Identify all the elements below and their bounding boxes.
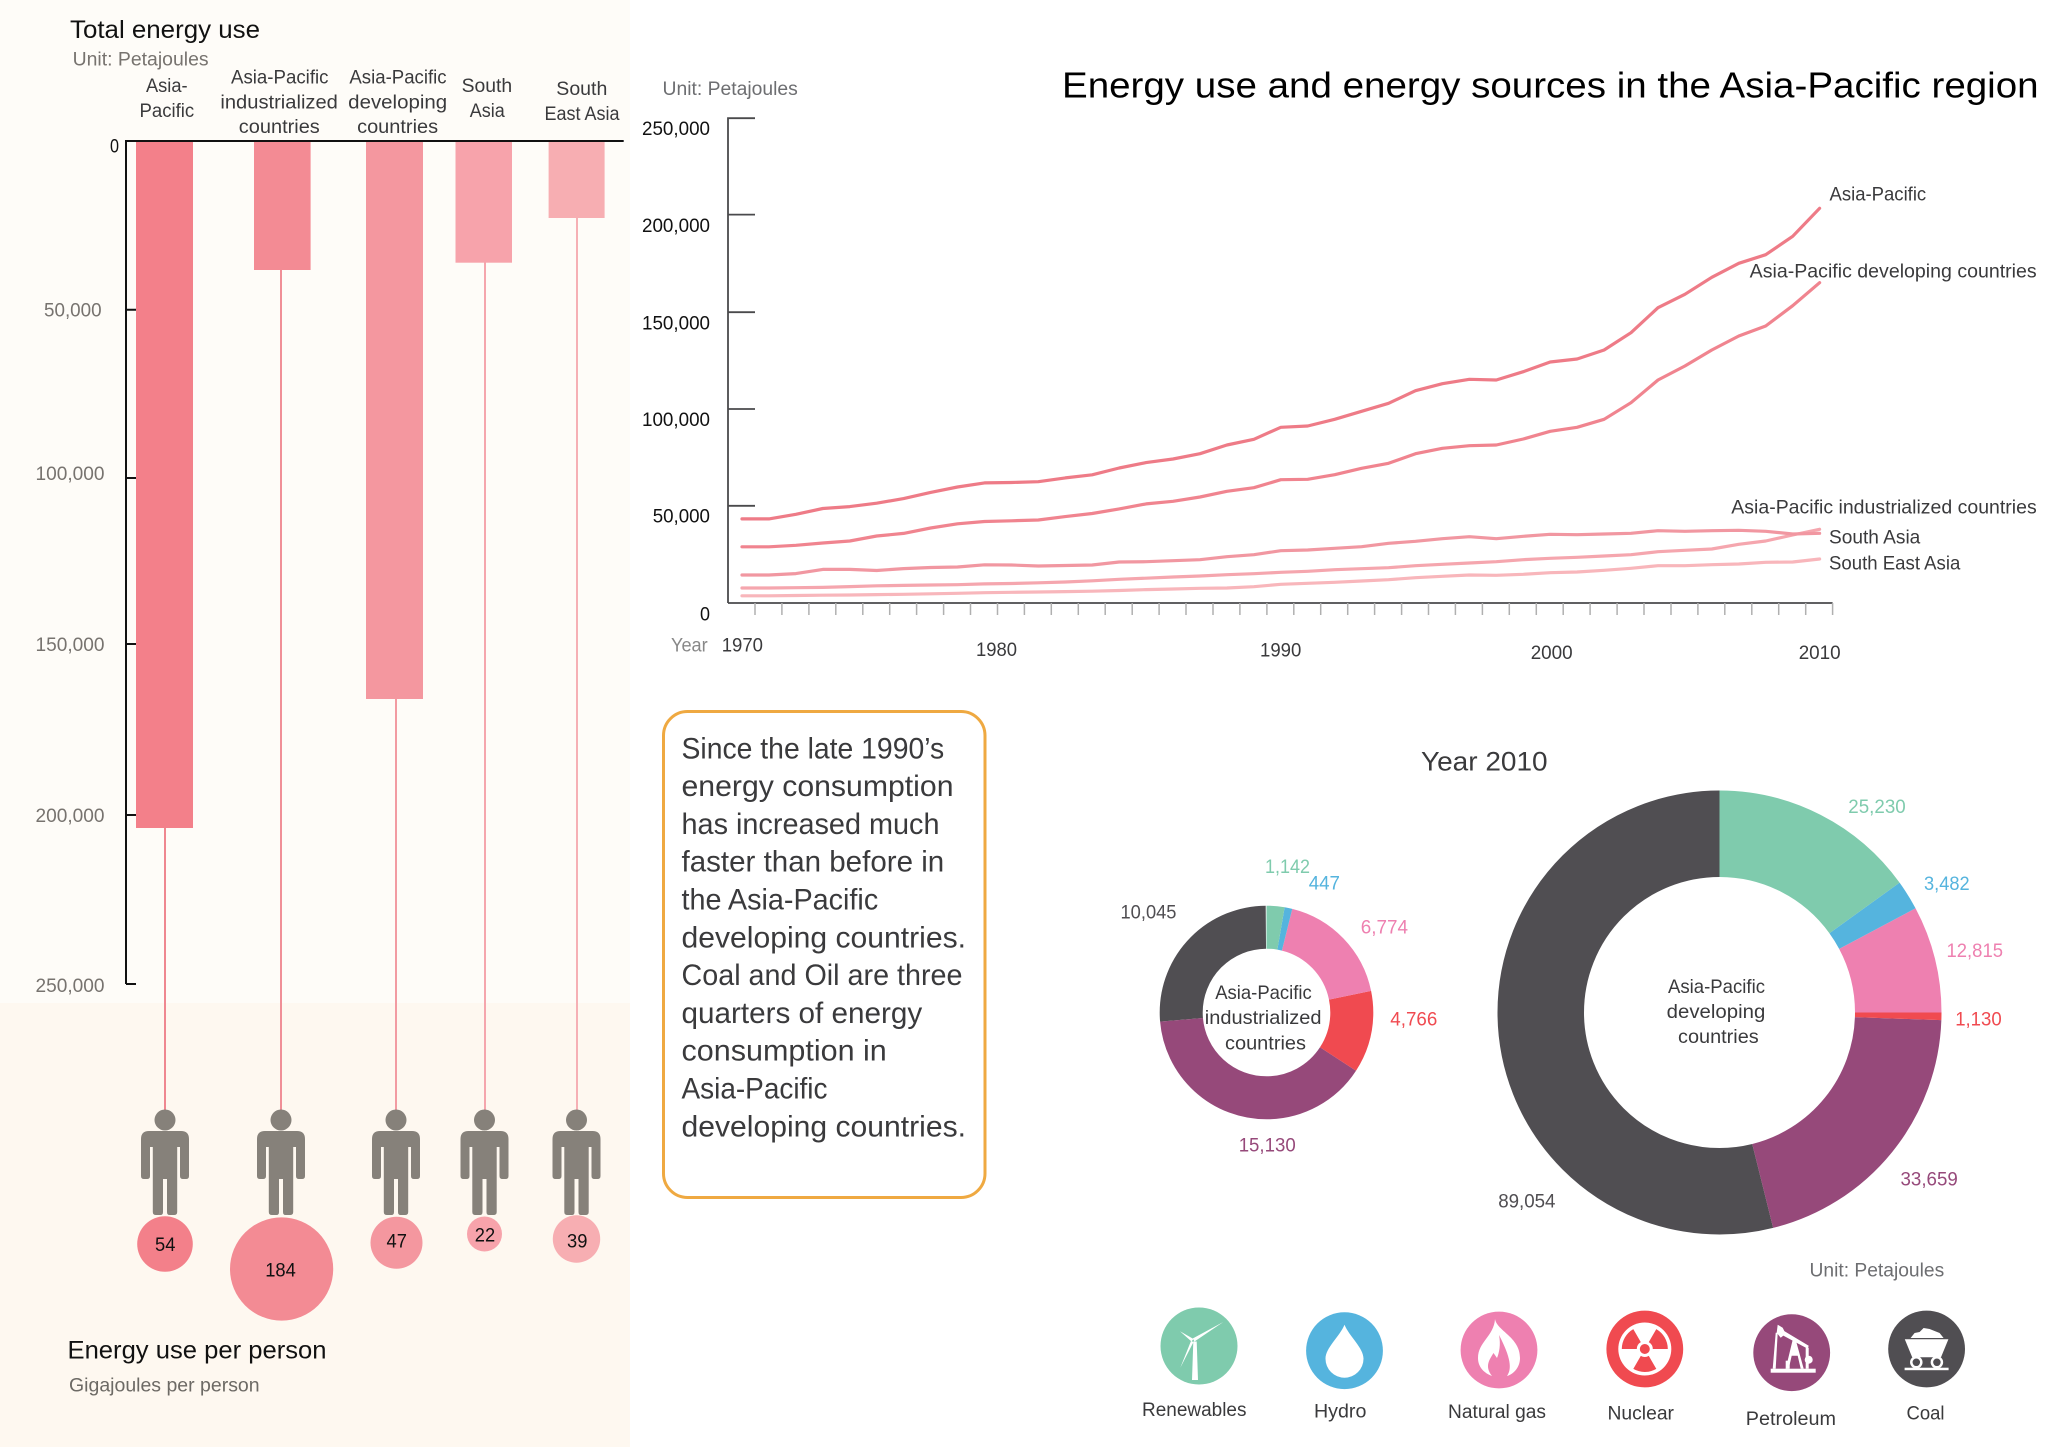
axis values: 250,000 (36, 976, 104, 997)
icon: coal (1888, 1311, 1965, 1425)
line labels: Asia-Pacific developing countries (1750, 260, 2037, 282)
column labels: Pacific (140, 101, 194, 122)
unit label: per person: Gigajoules per person (69, 1376, 260, 1397)
y axis values: 150,000 (642, 313, 710, 334)
line: Asia-Pacific industrialized countries (742, 530, 1820, 575)
icon: natural gas: Natural gas (1448, 1402, 1546, 1423)
per-person figure: South East Asia (552, 1110, 600, 1263)
x axis values: 1970 (722, 636, 763, 657)
per-person figure: Asia-Pacific industrialized countries (230, 1110, 333, 1321)
donut values: 6,774 (1361, 918, 1408, 939)
donut center label: countries (1225, 1032, 1306, 1054)
callout text: Since the late 1990’s (682, 732, 944, 765)
axis values: 200,000 (36, 806, 104, 827)
axis values: 0 (110, 137, 119, 158)
donut values: 15,130 (1239, 1136, 1296, 1156)
x axis values: Year (671, 636, 708, 657)
callout text: the Asia-Pacific (682, 884, 878, 916)
line labels: South East Asia (1829, 553, 1960, 575)
axis values: 150,000 (36, 635, 104, 656)
icon: nuclear (1606, 1311, 1683, 1425)
per-person figure: Asia-Pacific: 54 (155, 1235, 176, 1256)
per-person figure: South Asia (460, 1110, 508, 1252)
legend: energy sources (1142, 1308, 1965, 1430)
donut values: 25,230 (1848, 797, 1906, 818)
donut center label: industrialized (1205, 1007, 1322, 1029)
icon: petroleum: Petroleum (1746, 1409, 1836, 1430)
axis values (36, 137, 119, 997)
per-person figure: Asia-Pacific developing countries (370, 1110, 422, 1269)
y axis values: 50,000 (653, 507, 710, 528)
panel: total energy use and energy per person (0, 0, 630, 1447)
callout text: developing countries. (682, 1110, 966, 1143)
bar: Asia-Pacific developing countries (366, 141, 423, 699)
donut values: 10,045 (1120, 902, 1176, 923)
callout text (682, 732, 966, 1143)
donut values (1120, 857, 1437, 1156)
y axis values: 100,000 (642, 410, 710, 431)
y axis values: 0 (700, 605, 710, 626)
donut center label (1667, 976, 1765, 1048)
axes (126, 141, 624, 984)
icon: coal: Coal (1906, 1404, 1944, 1425)
column labels: countries (357, 117, 438, 138)
callout text: Coal and Oil are three (682, 959, 962, 992)
column labels: Asia-Pacific (349, 67, 447, 88)
donut center label: developing (1667, 1001, 1765, 1023)
callout text: quarters of energy (682, 997, 922, 1030)
callout text: developing countries. (682, 921, 966, 954)
unit label: donut charts: Unit: Petajoules (1810, 1261, 1944, 1282)
x axis ticks (755, 603, 1833, 615)
per-person figure: Asia-Pacific (137, 1110, 193, 1272)
heading: total energy use: Total energy use (70, 16, 260, 44)
x axis values (671, 636, 1841, 664)
line: South East Asia (742, 559, 1820, 596)
icon: hydro: Hydro (1314, 1402, 1366, 1423)
line labels: Asia-Pacific (1830, 184, 1926, 206)
bar: Asia-Pacific (136, 141, 193, 828)
callout text: faster than before in (682, 846, 944, 879)
per-person figure: Asia-Pacific industrialized countries: 184 (265, 1261, 296, 1282)
icon: hydro (1306, 1312, 1383, 1423)
column labels (140, 67, 620, 138)
column labels: East Asia (544, 104, 620, 125)
donut values: 1,130 (1955, 1010, 2002, 1030)
bar: South Asia (456, 141, 512, 263)
per-person figure: South Asia: 22 (475, 1226, 495, 1247)
x axis values: 1990 (1260, 641, 1301, 662)
heading: energy use per person: Energy use per person (68, 1337, 326, 1365)
column labels: industrialized (220, 93, 338, 114)
callout text: energy consumption (682, 770, 954, 803)
y axis (728, 118, 755, 603)
icon: renewables: Renewables (1142, 1400, 1246, 1421)
column labels: countries (239, 117, 320, 138)
x axis values: 2010 (1799, 643, 1841, 664)
y axis values: 250,000 (642, 119, 710, 140)
donut chart: Asia-Pacific developing countries (1498, 797, 2003, 1212)
per-person figure: South East Asia: 39 (567, 1232, 587, 1253)
line: Asia-Pacific (742, 208, 1820, 519)
axis values: 50,000 (44, 301, 102, 322)
line labels: South Asia (1829, 526, 1920, 548)
donut center label: Asia-Pacific (1668, 976, 1765, 998)
bar chart: total energy use (36, 137, 624, 1112)
x axis (728, 602, 1833, 604)
line labels: Asia-Pacific industrialized countries (1731, 497, 2037, 519)
donut center label: Asia-Pacific (1215, 982, 1312, 1004)
donut center label: countries (1678, 1026, 1759, 1048)
unit label: total energy: Unit: Petajoules (73, 50, 209, 71)
donut chart: Asia-Pacific industrialized countries (1120, 857, 1437, 1156)
x axis values: 2000 (1531, 643, 1573, 664)
donut values: 33,659 (1900, 1170, 1958, 1191)
line: South Asia (742, 529, 1820, 588)
callout text: consumption in (682, 1035, 887, 1068)
column labels: Asia (470, 101, 505, 122)
icon: renewables (1142, 1308, 1246, 1421)
column labels: developing (348, 93, 447, 114)
axis values: 100,000 (36, 464, 104, 485)
donut center label (1205, 982, 1322, 1054)
donut values: 89,054 (1498, 1191, 1556, 1212)
y axis values (642, 119, 710, 626)
line: Asia-Pacific developing countries (742, 283, 1820, 547)
bar: Asia-Pacific industrialized countries (254, 141, 311, 270)
column labels: South (462, 76, 512, 97)
connector lines (165, 215, 577, 1112)
icon: petroleum (1746, 1314, 1836, 1430)
donut values: 12,815 (1946, 941, 2003, 962)
x axis values: 1980 (976, 640, 1017, 661)
donut values: 4,766 (1390, 1009, 1437, 1030)
column labels: Asia-Pacific (231, 67, 328, 88)
icon: natural gas (1448, 1312, 1546, 1423)
icon: nuclear: Nuclear (1608, 1404, 1675, 1425)
heading: Year 2010: Year 2010 (1421, 747, 1548, 777)
unit label: line chart: Unit: Petajoules (662, 79, 798, 100)
donut values: 1,142 (1265, 857, 1310, 878)
callout text: has increased much (682, 808, 940, 841)
title: Energy use and energy sources in the Asia-Pacific region (1062, 64, 2039, 105)
y axis values: 200,000 (642, 216, 710, 237)
donut values: 447 (1309, 873, 1340, 894)
column labels: Asia- (146, 76, 188, 97)
donut values: 3,482 (1924, 874, 1970, 895)
per-person figure: Asia-Pacific developing countries: 47 (386, 1232, 407, 1253)
column labels: South (556, 79, 607, 100)
donut values (1498, 797, 2003, 1212)
callout text: Asia-Pacific (682, 1072, 828, 1106)
line labels (1731, 184, 2037, 575)
callout: summary text box (664, 712, 985, 1198)
bar: South East Asia (549, 141, 605, 218)
line chart: energy use 1970-2010 (642, 79, 2037, 664)
